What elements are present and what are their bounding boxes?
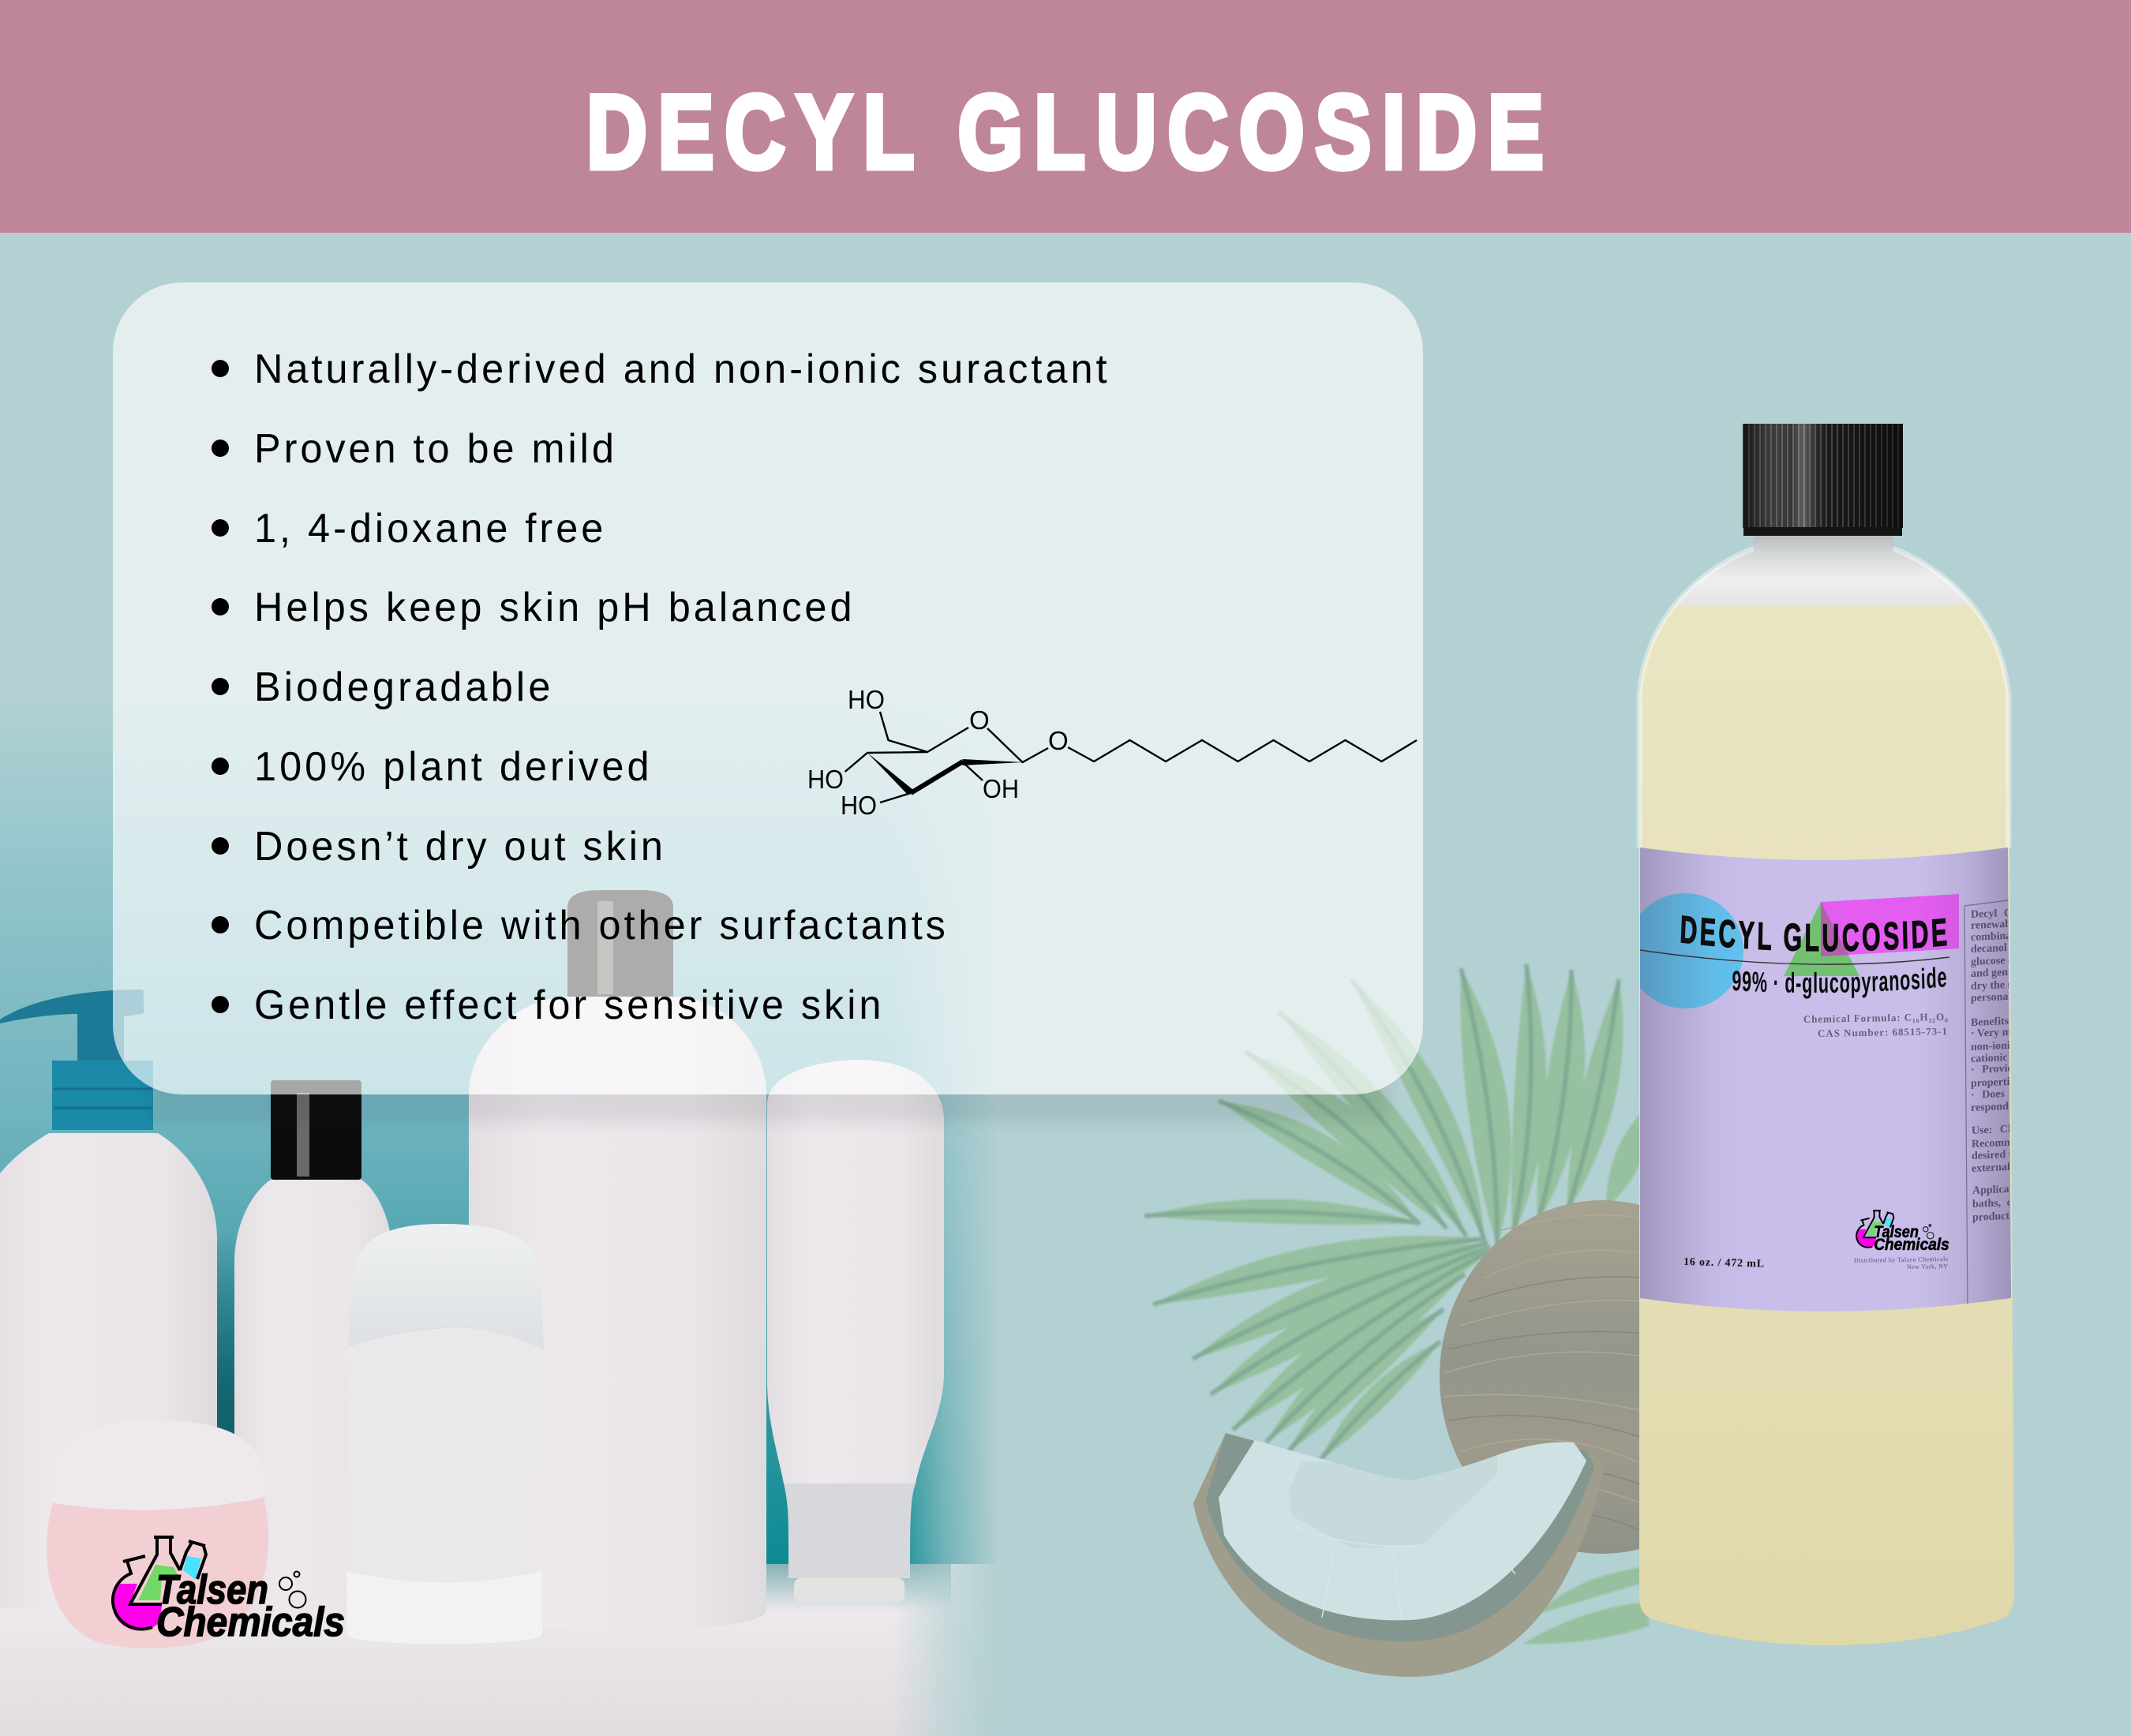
label formula: CAS Number: 68515-73-1: [1818, 1025, 1947, 1039]
big white bottle: [469, 890, 766, 1630]
palm fronds: [1144, 964, 1650, 1644]
label side panel: Decyl Glucoside: [1971, 906, 2050, 921]
label side panel: properties: [1971, 1076, 2020, 1090]
chemical structure diagram: HO: [807, 765, 844, 794]
photo: cosmetic bottles on shelf: [0, 739, 992, 1736]
chemical structure diagram: O: [969, 705, 990, 735]
label distributor: Distributed by Talsen Chemicals: [1854, 1255, 1948, 1264]
label side panel: glucose (corn): [1971, 953, 2037, 968]
bullet 4: Helps keep skin pH balanced: [254, 584, 852, 630]
cream jar: [47, 1420, 268, 1648]
label formula: [1804, 1013, 1948, 1037]
label distributor: [1854, 1256, 1948, 1270]
label subtitle: 99% · d-glucopyranoside: [1732, 967, 1946, 999]
bottle glass edge: [1639, 548, 2009, 847]
panel: benefits card: [113, 282, 1423, 1094]
label shape: blue circle: [1640, 893, 1743, 1008]
bullet 9: Gentle effect for sensitive skin: [254, 982, 881, 1027]
label shape: green triangle: [1784, 902, 1859, 976]
bullet list of benefits: [212, 346, 1107, 1027]
chemical structure diagram: [807, 685, 1417, 820]
bullet 8: Competible with other surfactants: [254, 902, 946, 948]
product label: [1640, 847, 2011, 1311]
label side panel: renewable: [1971, 918, 2019, 932]
squeeze tube: [767, 1060, 944, 1602]
bullet 2: Proven to be mild: [254, 425, 614, 471]
label side panel: dry the skin: [1971, 978, 2028, 993]
product bottle: [1637, 424, 2014, 1645]
label title: DECYL GLUCOSIDE: [1681, 915, 1947, 952]
deodorant stick: [346, 1224, 544, 1644]
halved coconut: [1193, 1433, 1605, 1677]
label volume: 16 oz. / 472 mL: [1683, 1256, 1764, 1270]
label logo: Talsen: [1874, 1223, 1919, 1241]
bullet 7: Doesn’t dry out skin: [254, 823, 663, 869]
black-cap bottle: [234, 1080, 393, 1626]
label distributor: New York, NY: [1907, 1263, 1948, 1270]
label side panel: baths, cleansers: [1972, 1195, 2050, 1210]
whole coconut: [1440, 1200, 1639, 1554]
bottle liquid: [1639, 548, 2014, 1645]
bullet 1: Naturally-derived and non-ionic suractant: [254, 346, 1107, 391]
label shape: magenta banner: [1821, 894, 1959, 956]
label side panel: personal care: [1971, 990, 2034, 1005]
chemical structure diagram: OH: [983, 774, 1019, 803]
label side panel: Benefits:: [1971, 1016, 2013, 1029]
label side panel: desired use: [1972, 1148, 2024, 1162]
label side panel: combination: [1971, 930, 2030, 944]
label side panel: respond to: [1971, 1100, 2021, 1114]
label side panel: · Provides: [1971, 1062, 2024, 1076]
label rule: [1640, 950, 1949, 964]
pump bottle: [0, 990, 217, 1610]
label side panel: cationic and: [1971, 1051, 2028, 1065]
label side panel: Use: Cleanser: [1972, 1122, 2042, 1137]
label logo: Chemicals: [1874, 1236, 1949, 1254]
chemical structure diagram: HO: [848, 685, 885, 714]
label side panel: products: [1972, 1210, 2014, 1224]
label shape: triangle overlap: [1821, 902, 1848, 956]
teal wall and white shelf: [0, 739, 992, 1736]
bullet 6: 100% plant derived: [254, 743, 650, 789]
logo: Talsen Chemicals: Talsen: [156, 1567, 268, 1613]
label side panel: and gentle: [1971, 966, 2020, 980]
bullet 3: 1, 4-dioxane free: [254, 505, 603, 551]
bullet 5: Biodegradable: [254, 664, 550, 709]
label side panel: · Very mild: [1971, 1026, 2024, 1040]
card shadow: [153, 1085, 1389, 1123]
label side panel: external use: [1972, 1161, 2028, 1175]
logo: Talsen Chemicals: [112, 1537, 345, 1645]
bottle cap: [1743, 424, 1903, 536]
label side panel: non-ionic: [1971, 1040, 2015, 1053]
label side panel: Recommended: [1972, 1136, 2042, 1150]
bottle neck and shoulder glass: [1639, 536, 2009, 710]
label side panel: Applications:: [1972, 1182, 2035, 1197]
label side panel: decanol and: [1971, 941, 2028, 956]
header band: [0, 0, 2131, 233]
label logo: [1856, 1210, 1949, 1254]
chemical structure diagram: HO: [841, 791, 877, 820]
logo: Talsen Chemicals: Chemicals: [156, 1599, 345, 1645]
label curvature shading: [1640, 836, 2011, 1326]
label formula: Chemical Formula: C₁₆H₃₂O₆: [1803, 1011, 1948, 1025]
title: DECYL GLUCOSIDE: [586, 73, 1544, 191]
label side panel: · Does not: [1971, 1087, 2028, 1102]
label side panel: [1964, 900, 2009, 1304]
chemical structure diagram: O: [1048, 726, 1069, 755]
